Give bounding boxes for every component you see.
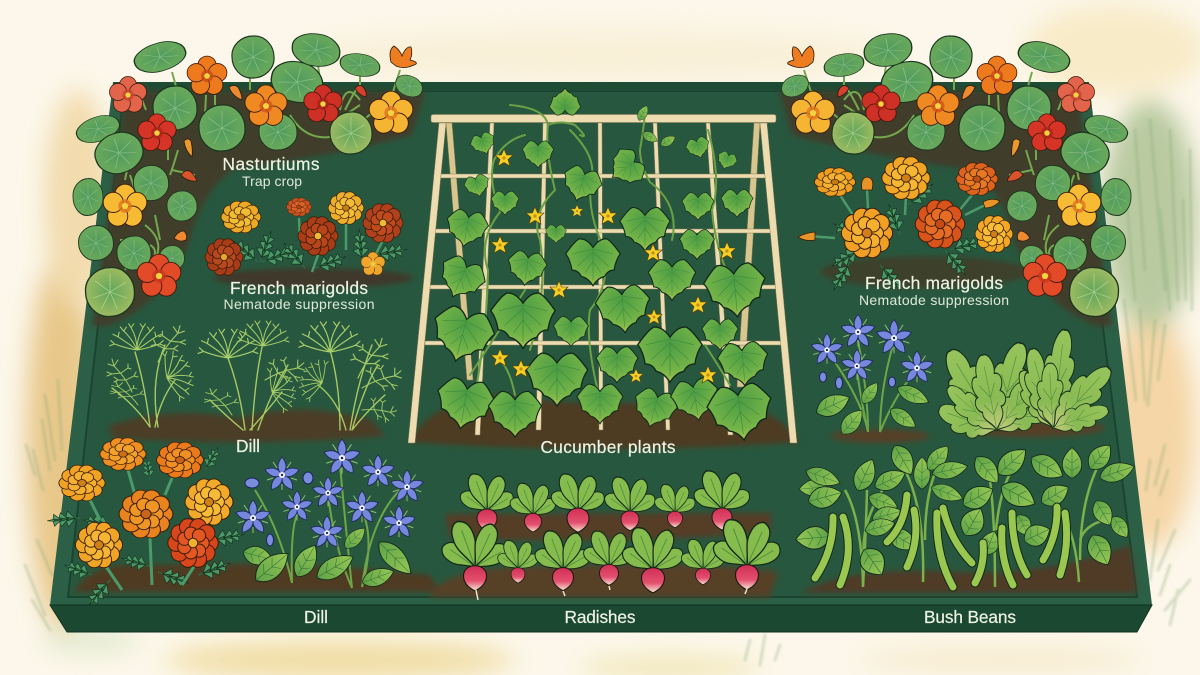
French marigolds, lower left <box>46 438 246 610</box>
label: Bush Beans: Bush Beans <box>924 607 1016 627</box>
trellis <box>408 114 797 443</box>
French marigolds, upper right <box>798 157 1013 295</box>
bed front face <box>50 605 1152 632</box>
label: Dill front: Dill <box>304 607 328 627</box>
borage flowers <box>235 439 424 549</box>
trellis top bar <box>431 114 776 122</box>
bush beans <box>795 439 1137 587</box>
French marigolds, upper left <box>205 192 409 276</box>
soil patches <box>74 91 1137 597</box>
radishes <box>438 468 784 600</box>
cucumber leaves <box>426 88 776 445</box>
trellis front legs <box>408 123 797 443</box>
nasturtiums, left corner <box>73 30 426 316</box>
label: Cucumber plants: Cucumber plants <box>540 437 676 457</box>
nasturtium buds <box>174 46 416 241</box>
nasturtium stems <box>120 65 400 270</box>
cucumber vines <box>470 105 735 420</box>
label: Nasturtiums: Nasturtiums <box>222 154 320 174</box>
label: Radishes: Radishes <box>564 607 636 627</box>
label: Dill: Dill <box>236 436 260 456</box>
bed frame outer <box>50 82 1152 632</box>
borage, right <box>810 314 934 439</box>
label: Nematode suppression right: Nematode suppression <box>859 292 1009 308</box>
labels <box>222 154 1016 627</box>
lettuce-like greens <box>932 328 1119 445</box>
bean stems <box>845 462 1105 587</box>
panel: raised garden bed <box>50 82 1152 632</box>
marigold foliage <box>228 218 409 276</box>
label: French marigolds left: French marigolds <box>230 278 368 298</box>
bean leaves <box>795 439 1137 581</box>
nasturtiums, right corner (mirrored) <box>778 30 1131 316</box>
cucumber plants <box>426 88 776 445</box>
label: French marigolds right: French marigolds <box>865 273 1003 293</box>
radish back row <box>457 468 753 532</box>
right lettuce plant <box>1010 328 1119 439</box>
trellis cross bars <box>425 174 782 345</box>
borage stems <box>255 465 400 588</box>
borage, lower left <box>235 439 424 590</box>
label: Trap crop: Trap crop <box>242 173 302 189</box>
bean pods <box>815 495 1067 587</box>
nasturtium leaves <box>73 30 426 316</box>
trellis back legs <box>446 123 760 387</box>
dill plants <box>107 321 405 430</box>
cucumber flowers <box>491 149 736 383</box>
bed floor <box>68 91 1137 597</box>
nasturtium flowers <box>103 56 413 296</box>
left lettuce plant <box>932 338 1064 445</box>
trellis verticals <box>475 123 733 435</box>
radish front row <box>438 516 784 600</box>
label: Nematode suppression left: Nematode suppression <box>224 296 374 312</box>
borage leaves <box>241 523 418 590</box>
